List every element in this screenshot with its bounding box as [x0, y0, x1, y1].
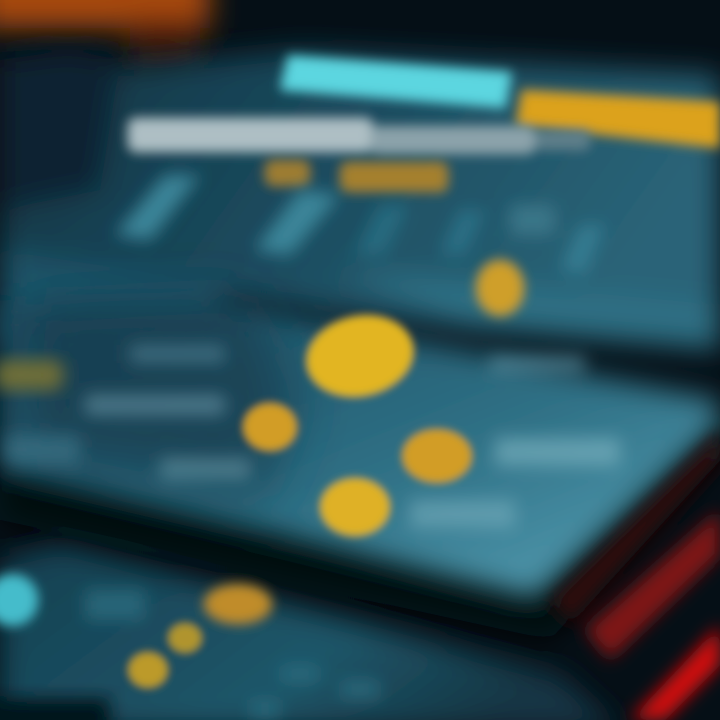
icon: upper yellow dot	[476, 260, 524, 316]
icon: right yellow circle	[402, 429, 472, 483]
cyan blob	[0, 574, 38, 626]
yellow dot one	[204, 584, 272, 624]
panel: lower screen	[0, 545, 620, 720]
panel: upper screen	[0, 50, 720, 350]
red edge of device	[550, 430, 720, 720]
subtitle yellow text	[265, 160, 448, 192]
lower faint marks	[85, 590, 380, 718]
cyan header bar	[280, 55, 512, 108]
upper chart stripes	[115, 175, 605, 275]
title text bar	[128, 118, 590, 154]
icon: large yellow circle	[299, 306, 421, 406]
yellow dot two	[168, 623, 202, 653]
tablet screen	[0, 305, 720, 598]
left text lines	[5, 345, 250, 480]
panel: central tablet	[0, 295, 720, 640]
right text lines	[410, 355, 620, 528]
icon: lower yellow circle	[320, 478, 390, 536]
left yellow label	[0, 360, 63, 390]
icon: small yellow circle	[243, 403, 297, 451]
dark left shade	[20, 295, 300, 500]
orange glow top left	[0, 0, 210, 70]
yellow header bar	[516, 90, 720, 148]
yellow dot three	[128, 652, 168, 688]
bottom left dark corner	[0, 698, 110, 720]
tablet bezel	[0, 400, 720, 640]
